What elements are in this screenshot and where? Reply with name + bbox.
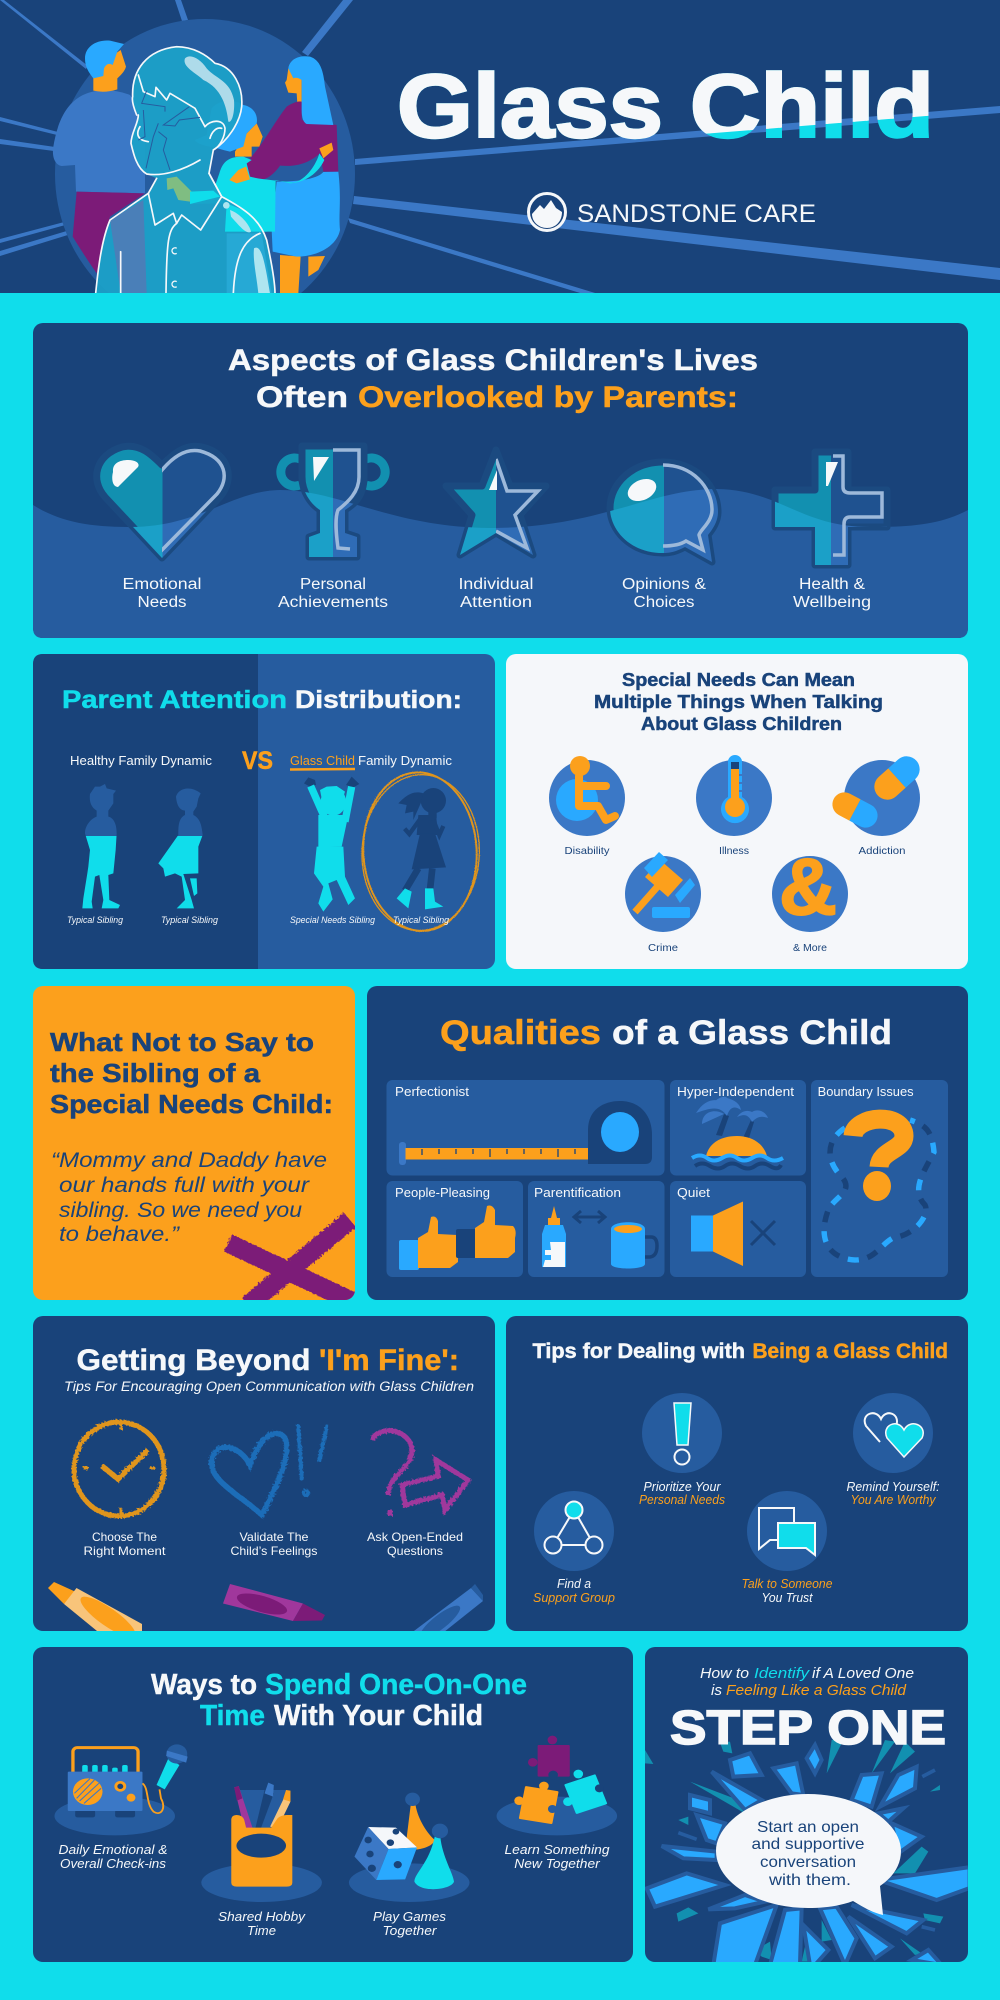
label: play games together: Play Games <box>373 1909 447 1924</box>
heading: Getting Beyond <box>76 1344 310 1377</box>
label: personal achievements: Personal <box>300 576 366 593</box>
label: choose the right moment: Choose The <box>92 1530 157 1544</box>
label: typical sibling 1: Typical Sibling <box>67 915 124 926</box>
icon: tape measure <box>399 1101 652 1165</box>
heading: Overlooked by Parents: <box>358 381 738 414</box>
label: remind yourself: Remind Yourself: <box>846 1480 940 1494</box>
icon: chat bubbles <box>747 1491 827 1571</box>
label: crime: Crime <box>648 942 678 954</box>
intro text: How to <box>700 1665 749 1682</box>
heading <box>76 1344 459 1377</box>
VS label: VS <box>242 747 273 775</box>
heading: Parent Attention <box>62 686 287 714</box>
logo mark <box>528 194 566 230</box>
panel: aspects overlooked by parents <box>33 323 968 638</box>
crayon: purple <box>223 1584 325 1621</box>
quote: to behave.” <box>59 1223 180 1246</box>
panel: parent attention distribution <box>33 654 495 969</box>
label: find a support group <box>533 1577 615 1605</box>
label: shared hobby time: Shared Hobby <box>218 1909 307 1924</box>
icon: radio and microphone <box>54 1744 188 1835</box>
label: learn something new together: Learn Something <box>504 1842 610 1857</box>
header banner <box>0 0 1000 293</box>
label: illness: Illness <box>719 845 749 857</box>
label: prioritize your personal needs <box>639 1480 725 1507</box>
quote: sibling. So we need you <box>59 1199 302 1222</box>
icon: chalk question mark and arrow <box>372 1431 468 1516</box>
title <box>400 70 929 140</box>
label: ask open-ended questions: Questions <box>387 1544 443 1558</box>
label: find a support group: Support Group <box>533 1591 615 1605</box>
label: health and wellbeing: Wellbeing <box>793 594 871 611</box>
icon: pills <box>828 751 925 836</box>
logo wordmark: SANDSTONE CARE <box>577 200 816 228</box>
icon: glass trophy <box>281 446 385 557</box>
label: glass child family dynamic <box>290 753 452 770</box>
icon: chalk clock <box>74 1422 164 1516</box>
label: shared hobby time <box>218 1909 307 1938</box>
heading <box>50 1027 333 1119</box>
icon: glass speech bubble <box>610 462 718 562</box>
label: individual attention: Individual <box>458 576 534 593</box>
label: play games together: Together <box>382 1923 437 1938</box>
panel: ways to spend one-on-one time <box>33 1647 633 1962</box>
heading <box>151 1669 527 1732</box>
icon: question mark in dashed boundary <box>824 1119 934 1260</box>
family illustration with glass child <box>52 19 355 293</box>
icon: bottle and mug <box>542 1206 657 1268</box>
panel: step one <box>645 1647 973 1965</box>
heading: About Glass Children <box>641 714 842 734</box>
heading <box>228 344 758 414</box>
bubble text: with them. <box>768 1872 851 1889</box>
icon: thermometer <box>696 755 772 836</box>
heading: of a Glass Child <box>612 1014 892 1052</box>
label: emotional needs: Emotional <box>122 576 202 593</box>
label: personal achievements: Achievements <box>278 594 388 611</box>
heading: Special Needs Child: <box>50 1089 333 1119</box>
heading: With Your Child <box>274 1700 483 1732</box>
icon: muted speaker <box>691 1202 775 1266</box>
bubble text: conversation <box>760 1854 856 1871</box>
icon: dice and game pawns <box>349 1793 470 1902</box>
label: typical sibling 2: Typical Sibling <box>161 915 219 926</box>
label: talk to someone: Talk to Someone <box>742 1577 833 1591</box>
silhouette: glass child girl <box>397 788 446 909</box>
label: glass child family dynamic: Family Dynamic <box>358 753 452 768</box>
title: Glass Child <box>397 57 934 157</box>
bubble text <box>752 1819 865 1889</box>
wave background <box>33 489 968 638</box>
panel: what not to say <box>33 986 360 1305</box>
shattered glass burst <box>645 1737 973 1965</box>
quote: our hands full with your <box>59 1174 310 1197</box>
label: emotional needs <box>122 576 202 611</box>
tile: perfectionist <box>386 1080 664 1176</box>
panel: qualities of a glass child <box>367 986 968 1300</box>
heading <box>440 1014 892 1052</box>
icon: chalk heart and exclamation marks <box>212 1425 327 1515</box>
icon: disability <box>549 756 625 836</box>
label: emotional needs: Needs <box>138 594 187 611</box>
label: typical sibling 3: Typical Sibling <box>393 915 450 926</box>
label: personal achievements <box>278 576 388 611</box>
tile: hyper-independent <box>670 1080 806 1176</box>
intro text: Identify <box>754 1665 811 1682</box>
label: Quiet <box>677 1185 710 1200</box>
bubble text: and supportive <box>752 1836 865 1853</box>
tile: parentification <box>528 1181 664 1277</box>
silhouette: typical sibling girl pose <box>158 789 203 908</box>
label: play games together <box>373 1909 447 1938</box>
heading: Distribution: <box>295 686 462 714</box>
icon: puzzle pieces <box>497 1736 617 1835</box>
label: validate the child's feelings: Child’s Feelings <box>230 1544 318 1558</box>
label: prioritize your personal needs: Prioritize Your <box>644 1480 721 1494</box>
heading <box>62 686 462 714</box>
panel: getting beyond I'm fine <box>33 1316 495 1643</box>
label: glass child family dynamic: Glass Child <box>290 753 355 768</box>
label: talk to someone <box>742 1577 833 1605</box>
label: daily emotional and overall check-ins <box>58 1842 168 1871</box>
subheading: Tips For Encouraging Open Communication with Glass Children <box>64 1379 474 1394</box>
heading: Qualities <box>440 1014 601 1052</box>
label: Boundary Issues <box>818 1084 914 1099</box>
label: remind yourself: You Are Worthy <box>850 1493 936 1507</box>
title: Glass Child <box>397 57 934 157</box>
label: validate the child's feelings: Validate The <box>240 1530 309 1544</box>
label: validate the child's feelings <box>230 1530 318 1558</box>
Sandstone Care logo <box>528 194 816 230</box>
purple brushed X <box>228 1220 360 1305</box>
intro text: is <box>711 1682 722 1699</box>
label: ask open-ended questions <box>367 1530 463 1558</box>
chalk circle highlight <box>359 769 482 934</box>
heading <box>594 670 883 734</box>
icon: ampersand: & <box>779 842 837 931</box>
icon: exclamation <box>642 1393 722 1473</box>
label: addiction: Addiction <box>858 845 906 857</box>
tile: quiet <box>670 1181 806 1277</box>
icon: thumbs up <box>399 1206 516 1270</box>
heading: 'I'm Fine': <box>319 1344 459 1377</box>
icon: glass medical cross <box>775 452 887 565</box>
label: choose the right moment <box>84 1530 166 1558</box>
heading: What Not to Say to <box>50 1027 314 1057</box>
tile: people-pleasing <box>386 1181 523 1277</box>
bubble text: Start an open <box>757 1819 859 1836</box>
panel: tips for dealing <box>506 1316 968 1631</box>
label: healthy family dynamic: Healthy Family Dynamic <box>70 753 212 768</box>
icon: hearts <box>853 1393 933 1473</box>
label: remind yourself <box>846 1480 940 1507</box>
heading: Special Needs Can Mean <box>622 670 855 690</box>
intro text: Feeling Like a Glass Child <box>726 1682 907 1699</box>
label: individual attention: Attention <box>460 594 532 611</box>
intro text: if A Loved One <box>812 1665 914 1682</box>
silhouette: special needs sibling <box>304 777 359 912</box>
label: learn something new together <box>504 1842 610 1871</box>
label: opinions and choices: Choices <box>634 594 695 611</box>
heading: Aspects of Glass Children's Lives <box>228 344 758 377</box>
light rays <box>0 0 1000 296</box>
label: learn something new together: New Together <box>514 1856 600 1871</box>
quote <box>51 1149 327 1246</box>
label: opinions and choices: Opinions & <box>622 576 707 593</box>
quote: “Mommy and Daddy have <box>51 1149 327 1172</box>
label: find a support group: Find a <box>557 1577 591 1591</box>
label: shared hobby time: Time <box>247 1923 276 1938</box>
icon: glass heart <box>97 446 228 558</box>
icon: glass star <box>454 458 542 558</box>
label: Hyper-Independent <box>677 1084 794 1099</box>
panel left half <box>33 654 258 969</box>
label: and more: & More <box>793 942 827 954</box>
label: Perfectionist <box>395 1084 469 1099</box>
label: talk to someone: You Trust <box>762 1591 813 1605</box>
STEP ONE heading: STEP ONE <box>670 1702 946 1755</box>
panel: special needs meanings <box>506 654 968 969</box>
icon: island <box>692 1097 783 1168</box>
icon: pencil cup <box>201 1783 322 1902</box>
label: choose the right moment: Right Moment <box>84 1544 166 1558</box>
label: health and wellbeing <box>793 576 871 611</box>
heading: Time <box>200 1700 265 1732</box>
label: opinions and choices <box>622 576 707 611</box>
heading <box>532 1340 948 1363</box>
label: People-Pleasing <box>395 1185 490 1200</box>
heading: the Sibling of a <box>50 1058 261 1088</box>
heading: Tips for Dealing with <box>532 1340 745 1363</box>
speech bubble <box>716 1794 901 1915</box>
heading: Multiple Things When Talking <box>594 692 883 712</box>
icon: gavel <box>625 852 701 932</box>
heading: Often <box>256 381 348 414</box>
crayon: orange <box>48 1582 142 1631</box>
silhouette: typical sibling boy <box>82 784 120 908</box>
tile: boundary issues <box>811 1080 948 1277</box>
label: daily emotional and overall check-ins: Daily Emotional & <box>58 1842 168 1857</box>
heading: Ways to <box>151 1669 257 1701</box>
intro text <box>700 1665 914 1699</box>
crayons <box>48 1582 483 1631</box>
label: health and wellbeing: Health & <box>799 576 866 593</box>
label: special needs sibling: Special Needs Sibling <box>290 915 376 926</box>
label: individual attention <box>458 576 534 611</box>
icon: support group network <box>534 1491 614 1571</box>
label: disability: Disability <box>564 845 610 857</box>
label: ask open-ended questions: Ask Open-Ended <box>367 1530 463 1544</box>
heading: Being a Glass Child <box>752 1340 948 1363</box>
label: daily emotional and overall check-ins: Overall Check-ins <box>60 1856 167 1871</box>
heading: Spend One-On-One <box>265 1669 527 1701</box>
crayon: blue <box>414 1584 483 1631</box>
label: Parentification <box>534 1185 621 1200</box>
label: prioritize your personal needs: Personal Needs <box>639 1493 725 1507</box>
children silhouettes <box>82 769 482 934</box>
